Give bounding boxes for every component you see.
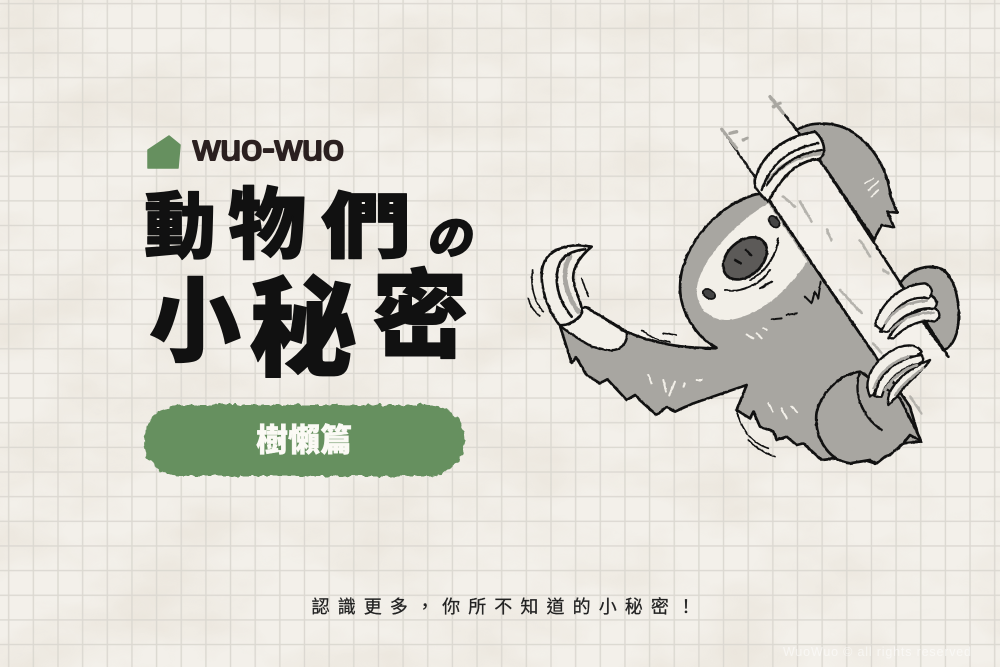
motion lines [528,270,775,457]
top claw lines [762,143,822,190]
left claw shading [565,257,578,312]
lower claws [867,345,930,405]
mouth [725,238,778,291]
trunk left edge over body [770,202,873,353]
top claw shading [768,153,820,182]
pill background [144,405,465,476]
sloth body and arm [560,193,920,463]
subtitle pill: 樹懶篇 [144,405,465,476]
fur highlights [648,328,797,418]
title: 動物們の小秘密: の [424,212,479,264]
eye left [701,287,717,301]
left claw inner line [557,249,585,317]
title: 動物們の小秘密 [144,181,479,390]
title: 動物們の小秘密: 密 [372,264,468,371]
tree trunk [722,97,948,413]
right upper claws [875,283,939,338]
title: 動物們の小秘密: 動 [144,188,216,268]
watermark: WuoWuo © all rights reserved [783,645,971,659]
left palm pad [560,307,627,350]
nose [715,229,775,288]
icon: green house [148,136,180,168]
left hand claws [542,245,592,325]
chest marks [772,282,821,319]
logo wordmark: wuo-wuo [192,127,344,168]
rear leg [816,372,922,463]
title: 動物們の小秘密: 們 [321,188,411,268]
title: 動物們の小秘密: 物 [228,181,306,269]
top hand claws [755,132,824,202]
eye right [766,214,782,230]
illustration: sloth on tree [528,97,959,463]
face mask [697,203,807,320]
trunk right edge [827,170,948,357]
upper arm behind trunk [797,124,897,239]
title: 動物們の小秘密: 小 [149,272,241,374]
title: 動物們の小秘密: 秘 [249,269,357,390]
caption: 認識更多，你所不知道的小秘密！ [312,597,703,617]
fur marks on upper arm [865,178,878,197]
leg fold line [858,372,882,430]
nostrils [735,250,751,263]
right hand arm behind trunk [900,267,959,350]
logo: wuo-wuo [148,127,344,168]
pill label: 樹懶篇 [256,422,352,458]
